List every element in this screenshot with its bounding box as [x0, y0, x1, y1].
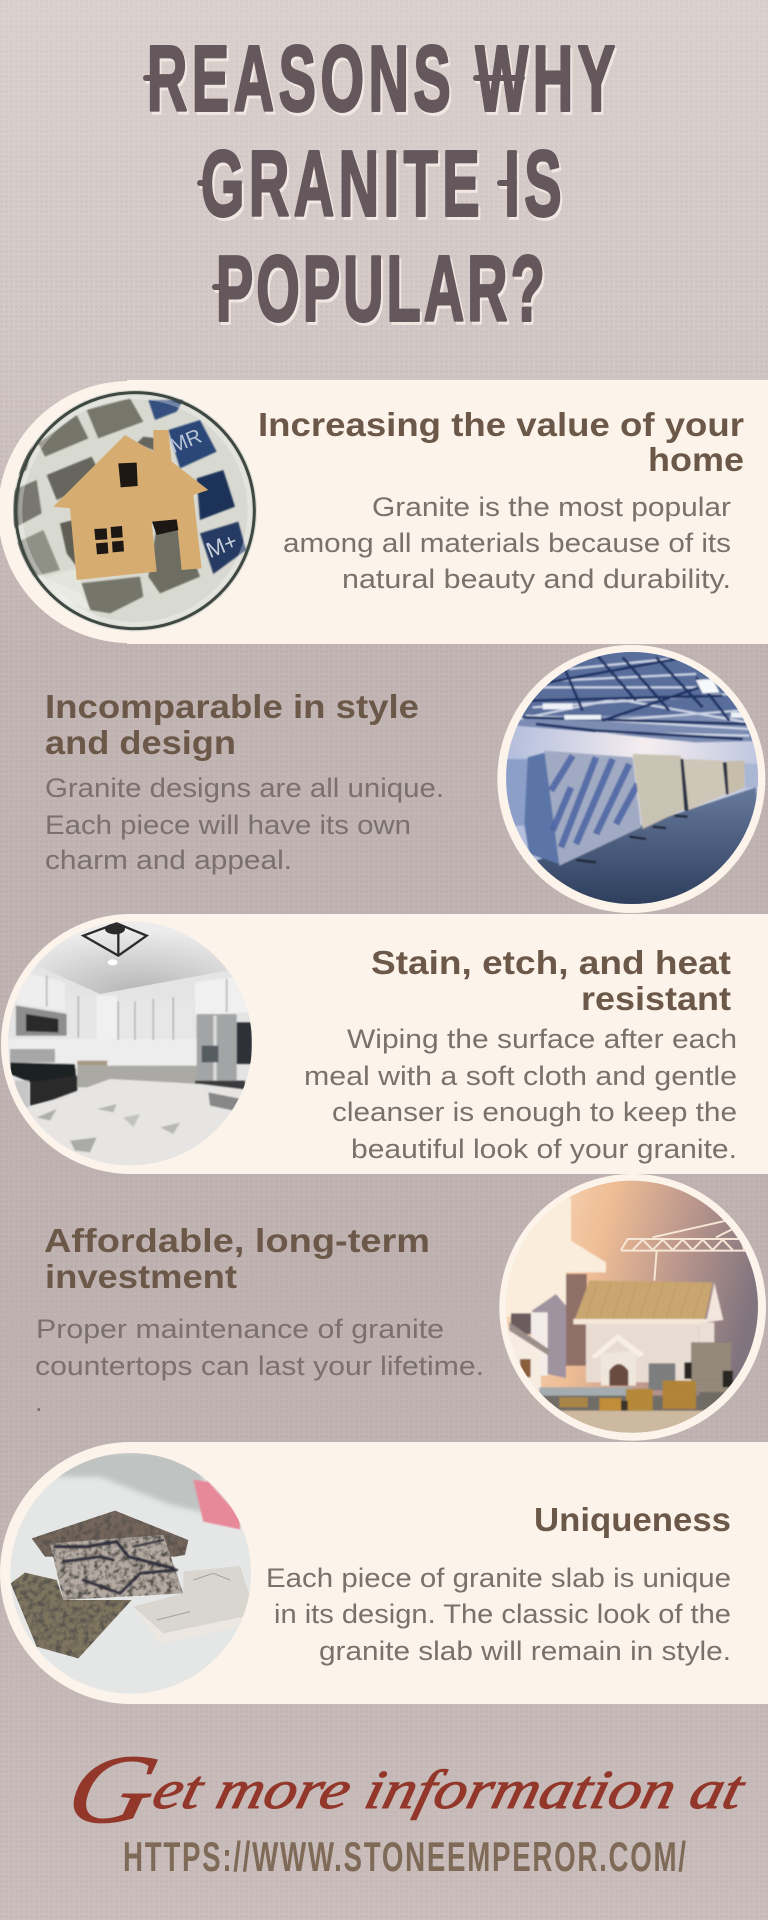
house cut-out — [53, 430, 208, 580]
heading: Increasing the value of your — [258, 406, 744, 443]
photo: wooden house on calculator: M+ — [203, 528, 241, 563]
body text: charm and appeal. — [45, 845, 292, 875]
heading: Incomparable in style — [45, 688, 419, 725]
title: POPULAR? — [216, 238, 545, 341]
photo: granite samples — [10, 1453, 251, 1694]
title — [143, 28, 615, 341]
heading — [45, 688, 419, 761]
body text: among all materials because of its — [283, 528, 731, 558]
heading: and design — [45, 724, 236, 761]
body text: beautiful look of your granite. — [351, 1134, 737, 1164]
heading: investment — [45, 1258, 237, 1295]
heading: Affordable, long-term — [44, 1222, 430, 1259]
body text — [35, 1314, 484, 1417]
photo: model house with coins — [496, 1174, 768, 1447]
panel: increasing the value of your home — [0, 380, 768, 644]
body text: countertops can last your lifetime. — [35, 1351, 484, 1381]
website url: HTTPS://WWW.STONEEMPEROR.COM/ — [123, 1833, 686, 1880]
body text — [283, 492, 731, 594]
body text: in its design. The classic look of the — [274, 1599, 731, 1629]
heading — [44, 1222, 430, 1295]
body text: natural beauty and durability. — [342, 564, 731, 594]
photo: wooden house on calculator: MR — [167, 425, 205, 458]
call to action script: G — [57, 1734, 169, 1844]
heading: Uniqueness — [534, 1501, 731, 1538]
photo: wooden house on calculator — [13, 390, 257, 632]
photo: white kitchen with granite island — [8, 921, 252, 1166]
call to action script: et more information at — [147, 1760, 752, 1821]
body text — [45, 773, 444, 875]
heading: Stain, etch, and heat — [371, 944, 731, 981]
body text: . — [35, 1387, 43, 1417]
title: GRANITE IS — [201, 133, 562, 236]
panel: uniqueness — [0, 1440, 768, 1704]
body text: meal with a soft cloth and gentle — [304, 1061, 737, 1091]
panel: stain, etch, and heat resistant — [0, 914, 768, 1181]
title: REASONS WHY — [147, 28, 615, 131]
body text: Granite is the most popular — [372, 492, 731, 522]
body text: Each piece will have its own — [45, 810, 411, 840]
body text: Granite designs are all unique. — [45, 773, 444, 803]
panel: incomparable in style and design — [45, 644, 768, 916]
heading: resistant — [581, 980, 731, 1017]
body text: Wiping the surface after each — [347, 1024, 737, 1054]
body text: Proper maintenance of granite — [36, 1314, 444, 1344]
body text — [266, 1563, 731, 1666]
body text: granite slab will remain in style. — [319, 1636, 731, 1666]
heading: home — [648, 441, 744, 478]
photo: slabs in warehouse — [496, 644, 768, 916]
body text: cleanser is enough to keep the — [332, 1097, 737, 1127]
heading — [258, 406, 744, 478]
panel: affordable, long-term investment — [35, 1174, 768, 1447]
body text — [304, 1024, 737, 1164]
body text: Each piece of granite slab is unique — [266, 1563, 731, 1593]
heading — [371, 944, 731, 1017]
